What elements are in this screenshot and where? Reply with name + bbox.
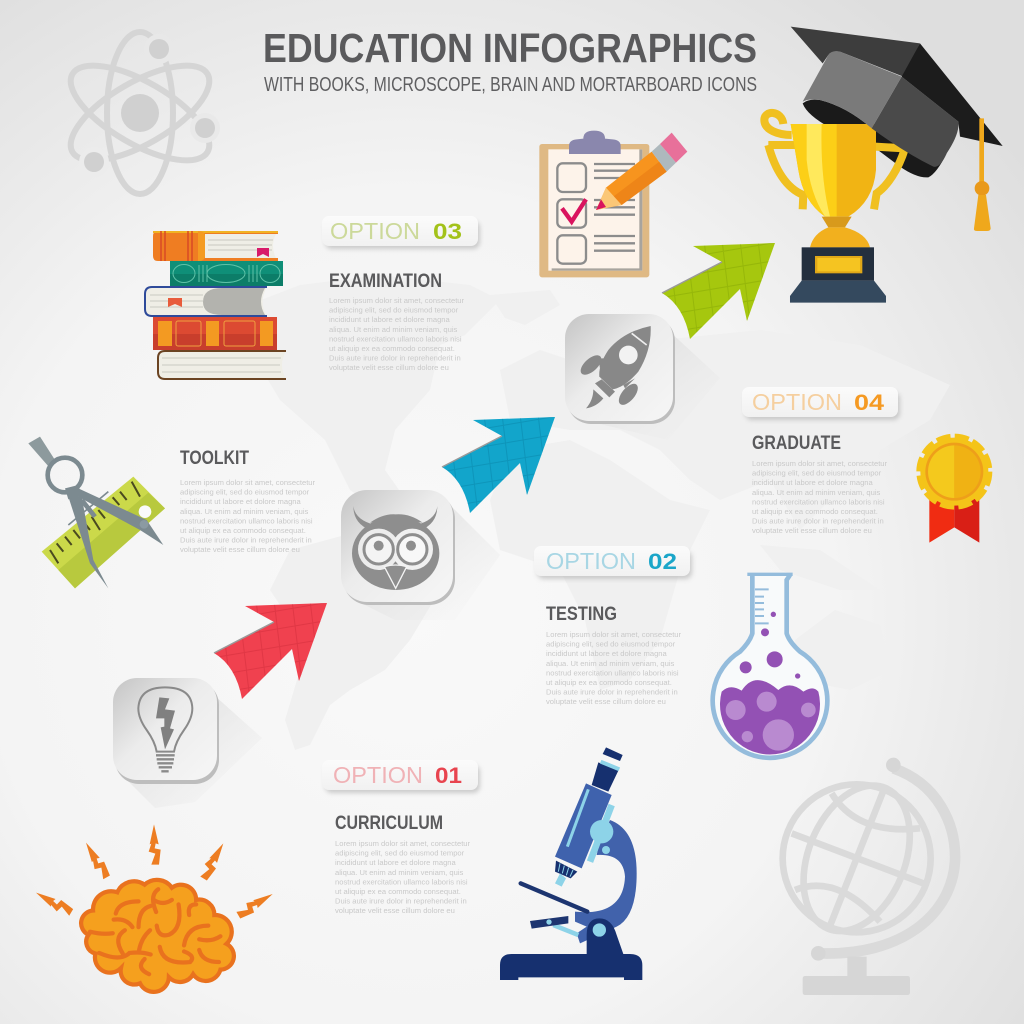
eyepiece bbox=[592, 762, 618, 792]
text block: graduate bbox=[752, 433, 888, 535]
text block: graduate: incididunt ut labore et dolore magna bbox=[752, 478, 874, 487]
text block: curriculum: ut aliquip ex ea commodo consequat. bbox=[335, 887, 461, 896]
text block: curriculum: Lorem ipsum dolor sit amet, consectetur bbox=[335, 839, 471, 848]
cap underside bbox=[803, 100, 947, 177]
option 02 tab: 02 bbox=[648, 549, 677, 574]
icon: clipboard and pencil bbox=[539, 131, 687, 277]
title bbox=[263, 25, 757, 96]
text block: graduate: aliqua. Ut enim ad minim veniam, quis bbox=[752, 488, 881, 497]
text block: examination: incididunt ut labore et dolore magna bbox=[329, 315, 451, 324]
long shadow bbox=[355, 505, 500, 620]
check mark bbox=[562, 199, 586, 222]
option 02 tab: OPTION bbox=[546, 548, 636, 574]
ruler bbox=[42, 477, 165, 588]
icon: microscope bbox=[500, 747, 642, 980]
text block: toolkit: incididunt ut labore et dolore magna bbox=[180, 497, 302, 506]
option 04 tab: 04 bbox=[854, 390, 885, 415]
owl bbox=[352, 506, 439, 590]
text block: graduate: nostrud exercitation ullamco laboris nisi bbox=[752, 497, 885, 506]
arrow: red bbox=[214, 603, 327, 699]
brown book bbox=[158, 351, 286, 379]
trophy cup bbox=[791, 124, 876, 217]
objective bbox=[555, 861, 577, 878]
rocket bbox=[577, 326, 651, 408]
icon: atom bbox=[57, 32, 223, 194]
text block: testing: voluptate velit esse cillum dolore eu bbox=[546, 697, 666, 706]
text block: testing: Duis aute irure dolor in reprehenderit in bbox=[546, 688, 678, 697]
long shadow bbox=[575, 330, 720, 440]
orange book bbox=[153, 231, 278, 261]
icon: trophy with mortarboard bbox=[764, 27, 1003, 303]
text block: examination bbox=[329, 271, 465, 372]
trophy foot bbox=[810, 227, 870, 247]
text block: examination: aliqua. Ut enim ad minim veniam, quis bbox=[329, 325, 458, 334]
pencil bbox=[596, 152, 667, 210]
text block: graduate: Lorem ipsum dolor sit amet, consectetur bbox=[752, 459, 888, 468]
option 02 tab bbox=[534, 546, 692, 579]
text block: toolkit: adipiscing elit, sed do eiusmod tempor bbox=[180, 488, 310, 497]
world map backdrop bbox=[235, 275, 950, 750]
text block: curriculum bbox=[335, 813, 471, 915]
text block: examination: ut aliquip ex ea commodo consequat. bbox=[329, 344, 455, 353]
text block: testing: adipiscing elit, sed do eiusmod tempor bbox=[546, 640, 676, 649]
text block: toolkit: TOOLKIT bbox=[180, 448, 249, 469]
subtitle: WITH BOOKS, MICROSCOPE, BRAIN AND MORTARBOARD ICONS bbox=[264, 74, 757, 96]
option 01 tab bbox=[322, 760, 480, 793]
text block: examination: voluptate velit esse cillum dolore eu bbox=[329, 363, 449, 372]
text block: graduate: adipiscing elit, sed do eiusmod tempor bbox=[752, 469, 882, 478]
text block: examination: adipiscing elit, sed do eiusmod tempor bbox=[329, 306, 459, 315]
text block: testing: ut aliquip ex ea commodo consequat. bbox=[546, 678, 672, 687]
icon: brain with sparks bbox=[33, 824, 276, 992]
stage bbox=[521, 883, 587, 912]
red book bbox=[153, 317, 277, 350]
blue book bbox=[145, 287, 267, 316]
text block: testing: Lorem ipsum dolor sit amet, consectetur bbox=[546, 630, 682, 639]
text block: testing: nostrud exercitation ullamco laboris nisi bbox=[546, 668, 679, 677]
text block: toolkit: ut aliquip ex ea commodo consequat. bbox=[180, 526, 306, 535]
option 01 tab: 01 bbox=[435, 763, 462, 788]
text block: curriculum: CURRICULUM bbox=[335, 813, 443, 834]
icon: globe bbox=[783, 758, 955, 995]
clipboard bbox=[539, 144, 649, 277]
cap body left face bbox=[803, 51, 902, 128]
cap body right face bbox=[872, 77, 959, 167]
icon: medal bbox=[920, 437, 989, 543]
text block: graduate: GRADUATE bbox=[752, 433, 841, 454]
text block: toolkit: Duis aute irure dolor in reprehenderit in bbox=[180, 536, 312, 545]
tassel bbox=[975, 118, 989, 183]
trophy stem bbox=[822, 217, 852, 227]
icon: flask bbox=[713, 574, 827, 758]
arrow: green bbox=[662, 243, 775, 339]
text block: testing bbox=[546, 604, 682, 706]
option 03 tab: OPTION bbox=[330, 218, 420, 244]
mirror bbox=[553, 925, 578, 935]
text block: curriculum: incididunt ut labore et dolore magna bbox=[335, 858, 457, 867]
text block: curriculum: Duis aute irure dolor in reprehenderit in bbox=[335, 897, 467, 906]
bulb bbox=[138, 687, 192, 771]
checkboxes bbox=[557, 163, 635, 264]
long shadow bbox=[125, 695, 262, 808]
cap board bbox=[791, 27, 920, 77]
text block: graduate: ut aliquip ex ea commodo consequat. bbox=[752, 507, 878, 516]
clip bbox=[569, 131, 621, 154]
text block: curriculum: adipiscing elit, sed do eiusmod tempor bbox=[335, 849, 465, 858]
option 01 tab: OPTION bbox=[333, 762, 423, 788]
compass bbox=[28, 437, 163, 588]
text block: examination: Lorem ipsum dolor sit amet, consectetur bbox=[329, 296, 465, 305]
icon tile: light bulb bbox=[113, 678, 262, 808]
tube bbox=[590, 805, 612, 862]
option 04 tab: OPTION bbox=[752, 389, 842, 415]
option 03 tab: 03 bbox=[433, 219, 462, 244]
text block: toolkit: Lorem ipsum dolor sit amet, consectetur bbox=[180, 478, 316, 487]
text block: examination: Duis aute irure dolor in reprehenderit in bbox=[329, 354, 461, 363]
text block: toolkit: nostrud exercitation ullamco laboris nisi bbox=[180, 516, 313, 525]
option 03 tab bbox=[322, 216, 480, 249]
text block: examination: nostrud exercitation ullamco laboris nisi bbox=[329, 334, 462, 343]
arm bbox=[575, 820, 637, 943]
text block: toolkit: voluptate velit esse cillum dolore eu bbox=[180, 545, 300, 554]
heading: EDUCATION INFOGRAPHICS bbox=[263, 25, 757, 71]
text block: examination: EXAMINATION bbox=[329, 271, 442, 292]
arrow: blue bbox=[442, 417, 555, 513]
text block: testing: incididunt ut labore et dolore magna bbox=[546, 649, 668, 658]
text block: toolkit: aliqua. Ut enim ad minim veniam, quis bbox=[180, 507, 309, 516]
pedestal bbox=[802, 247, 874, 281]
text block: testing: TESTING bbox=[546, 604, 617, 625]
icon tile: owl bbox=[341, 490, 500, 620]
brain bbox=[81, 880, 234, 992]
text block: graduate: Duis aute irure dolor in reprehenderit in bbox=[752, 517, 884, 526]
green book bbox=[170, 261, 283, 286]
option 04 tab bbox=[742, 387, 900, 420]
icon tile: rocket bbox=[565, 314, 720, 440]
text block: testing: aliqua. Ut enim ad minim veniam, quis bbox=[546, 659, 675, 668]
text block: curriculum: voluptate velit esse cillum dolore eu bbox=[335, 906, 455, 915]
text block: graduate: voluptate velit esse cillum dolore eu bbox=[752, 526, 872, 535]
text block: toolkit bbox=[180, 448, 316, 554]
spark bolts bbox=[33, 824, 276, 920]
trophy handles bbox=[764, 113, 905, 209]
text block: curriculum: aliqua. Ut enim ad minim veniam, quis bbox=[335, 868, 464, 877]
icon: compass and ruler bbox=[28, 437, 165, 588]
text block: curriculum: nostrud exercitation ullamco laboris nisi bbox=[335, 877, 468, 886]
icon: stack of books bbox=[145, 231, 286, 379]
base bbox=[500, 918, 642, 980]
